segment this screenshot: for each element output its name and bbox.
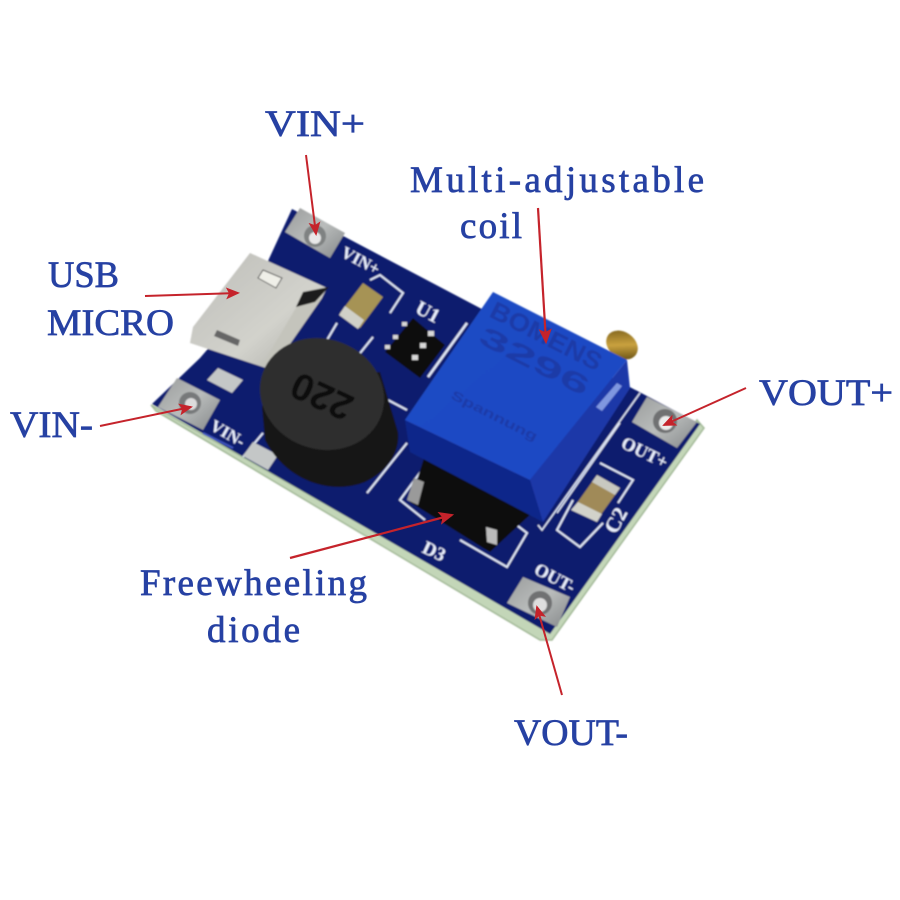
circuit board module	[151, 208, 704, 640]
arrow: Freewheeling diode	[290, 515, 452, 558]
label: Freewheeling diode: diode	[207, 610, 300, 651]
label: Multi-adjustable coil: coil	[460, 206, 522, 247]
label: USB MICRO: USB	[48, 255, 119, 296]
arrow: VOUT+	[664, 388, 746, 425]
micro USB connector	[190, 253, 329, 370]
label: USB MICRO	[47, 255, 174, 344]
arrow: USB MICRO	[145, 293, 238, 296]
label: VOUT+: VOUT+	[759, 373, 893, 414]
arrow: VOUT-	[537, 607, 562, 695]
arrow: VIN-	[100, 407, 191, 426]
silkscreen labels: OUT-	[531, 559, 579, 597]
potentiometer: BOMENS	[485, 296, 607, 377]
silkscreen labels	[207, 243, 671, 597]
board surface	[152, 209, 700, 634]
diode	[407, 455, 533, 552]
U1 chip	[385, 318, 445, 378]
label: Freewheeling diode: Freewheeling	[140, 563, 367, 604]
pad VIN+	[285, 208, 345, 258]
silkscreen labels: D3	[419, 537, 449, 566]
pad VIN-	[158, 378, 220, 430]
label: USB MICRO: MICRO	[47, 303, 174, 344]
label: Multi-adjustable coil: Multi-adjustable	[410, 160, 704, 201]
arrow: VIN+	[306, 155, 316, 234]
board edge	[151, 405, 704, 640]
potentiometer: 3296	[474, 321, 595, 402]
pad OUT-	[507, 577, 570, 627]
pad OUT+	[632, 397, 697, 448]
silkscreen labels: OUT+	[618, 433, 671, 472]
capacitor C1	[339, 283, 383, 329]
silkscreen labels: VIN+	[338, 243, 383, 279]
label: VIN+: VIN+	[265, 104, 365, 145]
inductor	[244, 321, 400, 487]
label: VOUT-: VOUT-	[514, 713, 628, 754]
capacitor C2	[571, 475, 620, 522]
silkscreen labels: VIN-	[207, 416, 249, 451]
brass adjustment screw	[601, 325, 643, 365]
inductor: 220	[285, 363, 360, 428]
potentiometer: Spannung	[449, 387, 540, 444]
label: Freewheeling diode	[140, 563, 367, 651]
small solder pads	[207, 368, 278, 470]
silkscreen lines	[203, 275, 640, 567]
label: Multi-adjustable coil	[410, 160, 704, 247]
arrow: Multi-adjustable coil	[538, 208, 546, 342]
label: VIN-: VIN-	[10, 405, 93, 446]
silkscreen labels: C2	[599, 503, 632, 537]
silkscreen labels: U1	[412, 297, 444, 328]
potentiometer	[405, 292, 643, 522]
